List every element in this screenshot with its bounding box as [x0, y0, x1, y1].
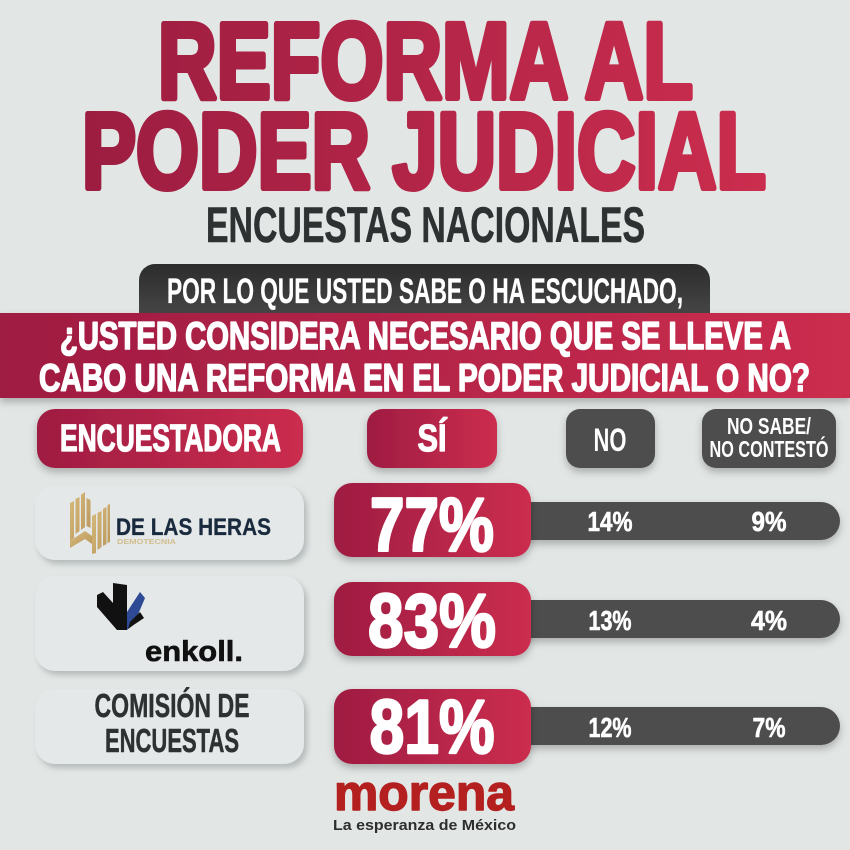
- title: [82, 0, 766, 211]
- logo: morena: morena: [334, 765, 515, 821]
- row 1: de las heras: [35, 483, 840, 568]
- row 3: comision de encuestas: 81%: [370, 685, 494, 770]
- logo icon: gold columns: [70, 492, 110, 554]
- header: si: [367, 409, 497, 468]
- logo wordmark: enkoll: enkoll.: [145, 636, 243, 668]
- logo card: enkoll: [35, 576, 304, 671]
- logo card: de las heras: [35, 485, 304, 560]
- logo wordmark: de las heras: DE LAS HERAS: [116, 514, 271, 541]
- bar: no and no sabe: [500, 600, 840, 638]
- row 2: enkoll: [35, 576, 840, 671]
- title: REFORMA AL: [158, 0, 693, 121]
- value: si 83: [334, 582, 531, 656]
- header: encuestadora: [37, 409, 303, 468]
- value: no 12: 12%: [588, 712, 632, 743]
- logo: morena: La esperanza de México: [333, 817, 516, 834]
- logo icon: enkoll mark: [97, 583, 145, 630]
- bar: no and no sabe: [500, 707, 840, 745]
- logo card: comision de encuestas: [35, 689, 304, 764]
- header: encuestadora: ENCUESTADORA: [60, 418, 281, 460]
- panel: question intro: [139, 264, 710, 334]
- row 3: comision de encuestas: ENCUESTAS: [105, 722, 239, 759]
- label: comision de encuestas: COMISIÓN DE: [94, 687, 250, 724]
- row 3: comision de encuestas: [35, 685, 840, 770]
- value: no 14: 14%: [588, 506, 633, 537]
- value: ns 9: 9%: [752, 506, 787, 537]
- bar: no and no sabe: [500, 502, 840, 540]
- header: no: [566, 409, 655, 468]
- value: ns 4: 4%: [751, 605, 787, 636]
- header: no sabe / no contesto: [702, 409, 836, 468]
- header: si: SÍ: [418, 416, 448, 460]
- value: ns 7: 7%: [752, 712, 786, 743]
- row 2: enkoll: 83%: [368, 579, 496, 664]
- value: si 77: [334, 483, 531, 557]
- subtitle: ENCUESTAS NACIONALES: [206, 197, 645, 253]
- value: no 13: 13%: [588, 605, 632, 636]
- value: si 81: [334, 689, 531, 764]
- panel: question banner: [0, 313, 850, 400]
- row 1: de las heras: 77%: [370, 483, 494, 568]
- header: no sabe / no contesto: NO SABE/: [727, 413, 811, 439]
- header: no: NO: [594, 422, 626, 458]
- logo tagline: demotecnia: DEMOTECNIA: [117, 539, 176, 546]
